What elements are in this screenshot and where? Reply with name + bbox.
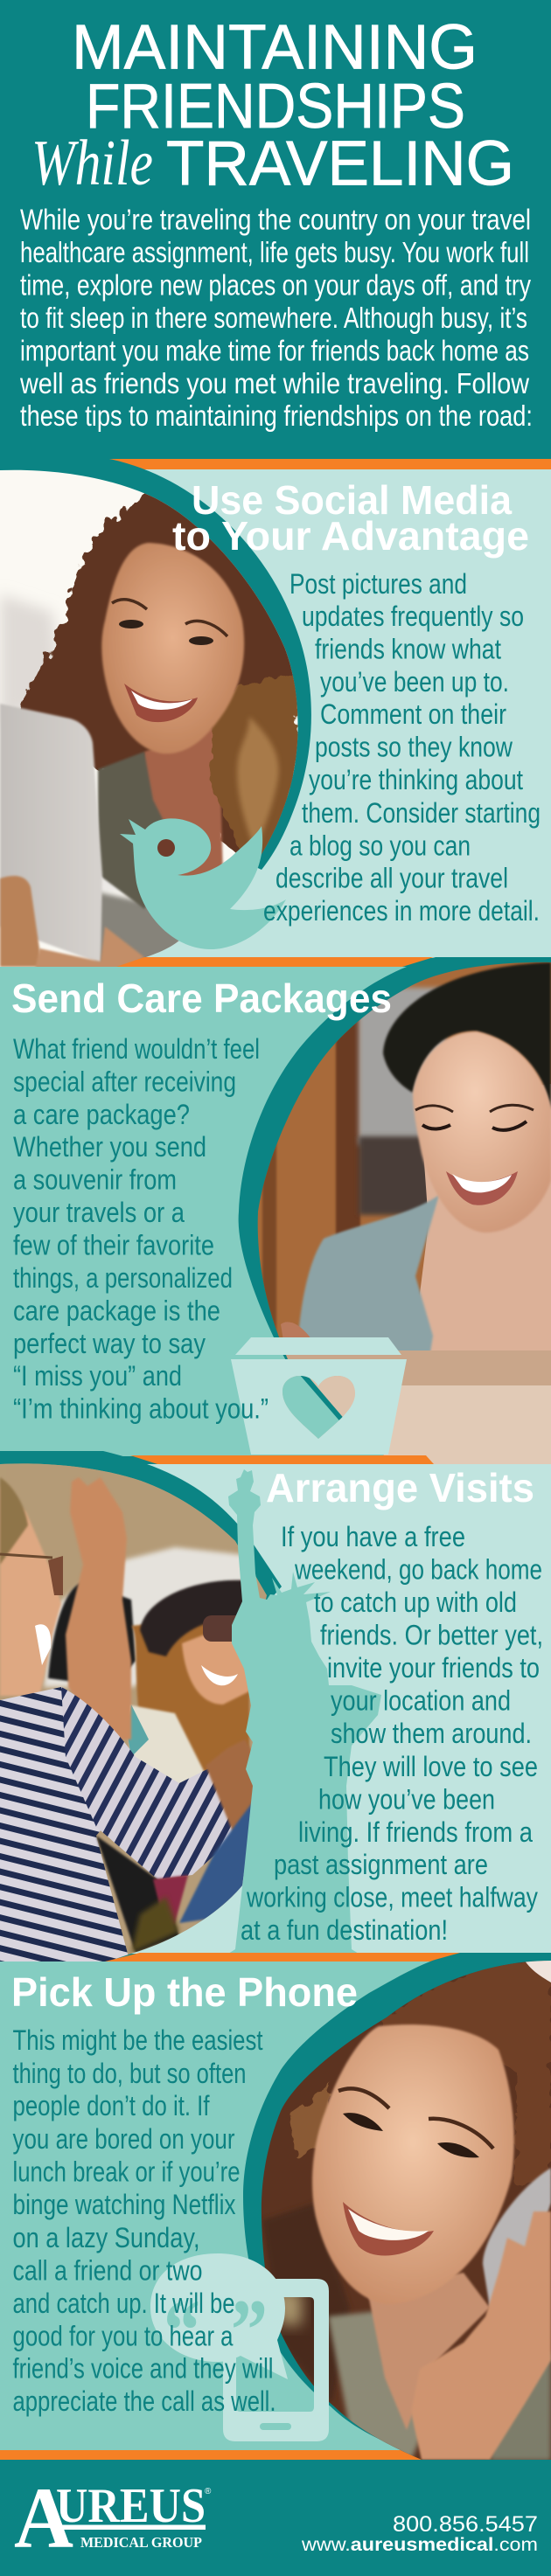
body text xyxy=(12,2024,276,2417)
icon: bird xyxy=(120,818,286,949)
body text: past assignment are xyxy=(274,1849,488,1880)
title: While xyxy=(31,128,153,199)
body text: What friend wouldn’t feel xyxy=(13,1033,260,1065)
heading: to Your Advantage xyxy=(172,513,529,559)
teal arc xyxy=(243,1953,551,2450)
body text: your travels or a xyxy=(13,1197,185,1228)
body text: a care package? xyxy=(13,1099,190,1130)
heading: Pick Up the Phone xyxy=(11,1969,358,2015)
icon: statue of liberty xyxy=(228,1469,381,1954)
orange band: section 3 to 4 xyxy=(105,1953,460,1962)
body text xyxy=(241,1521,543,1946)
photo: woman opening package xyxy=(254,957,551,1473)
body text: describe all your travel xyxy=(276,862,508,893)
logo: Aureus Medical Group: UREUS xyxy=(56,2479,206,2533)
orange band top xyxy=(107,459,551,469)
heading: Use Social Media xyxy=(192,477,512,523)
orange band top xyxy=(130,1455,434,1464)
body text: a souvenir from xyxy=(13,1164,177,1196)
panel background xyxy=(0,1962,551,2451)
body text: special after receiving xyxy=(13,1066,236,1098)
body text: This might be the easiest xyxy=(12,2024,263,2056)
body text: appreciate the call as well. xyxy=(12,2385,276,2417)
body text: perfect way to say xyxy=(13,1328,206,1359)
panel background xyxy=(0,469,551,958)
heading: Arrange Visits xyxy=(266,1465,534,1510)
orange band bottom xyxy=(105,1953,460,1962)
body text: lunch break or if you’re xyxy=(12,2156,240,2187)
body text: friends know what xyxy=(315,633,501,664)
panel background xyxy=(0,1464,551,1954)
body text: your location and xyxy=(331,1685,511,1717)
body text: and catch up. It will be xyxy=(12,2288,234,2319)
body text: Whether you send xyxy=(13,1131,206,1163)
photo: woman on phone xyxy=(254,1954,551,2465)
panel: pick up the phone xyxy=(0,1953,551,2465)
body text xyxy=(13,1033,269,1425)
intro text xyxy=(19,203,533,432)
teal arc xyxy=(0,459,311,870)
quotation marks: “ xyxy=(164,2281,200,2378)
body text: call a friend or two xyxy=(12,2255,203,2287)
photo: friends in a car xyxy=(0,1460,271,1967)
orange band bottom xyxy=(0,2450,424,2460)
body text: “I’m thinking about you.” xyxy=(13,1393,269,1425)
footer xyxy=(14,2469,538,2566)
body text: thing to do, but so often xyxy=(12,2058,247,2089)
phone number: 800.856.5457 xyxy=(393,2512,538,2537)
header panel xyxy=(19,12,533,432)
body text: Comment on their xyxy=(320,698,506,730)
icon: heart cutout xyxy=(282,1376,355,1439)
body text: you’ve been up to. xyxy=(320,666,509,698)
body text: posts so they know xyxy=(315,731,513,762)
logo: Aureus Medical Group: MEDICAL GROUP xyxy=(80,2534,202,2551)
title: FRIENDSHIPS xyxy=(86,72,465,142)
body text: friend’s voice and they will xyxy=(12,2353,273,2385)
body text: binge watching Netflix xyxy=(12,2189,236,2220)
body text: things, a personalized xyxy=(13,1262,233,1294)
body text: how you’ve been xyxy=(318,1783,495,1815)
body text: on a lazy Sunday, xyxy=(12,2222,199,2253)
body text: you are bored on your xyxy=(12,2123,235,2155)
body text: at a fun destination! xyxy=(241,1914,448,1946)
body text xyxy=(263,568,541,927)
body text: a blog so you can xyxy=(289,830,471,862)
body text: If you have a free xyxy=(281,1521,465,1552)
panel: arrange visits xyxy=(0,1451,551,1967)
panel: send care packages xyxy=(0,957,551,1473)
body text: good for you to hear a xyxy=(12,2320,234,2351)
teal arc xyxy=(0,1451,282,1661)
panel: use social media xyxy=(0,459,551,970)
icon: gift box xyxy=(231,1337,407,1455)
logo: Aureus Medical Group: ® xyxy=(205,2487,212,2496)
logo: Aureus Medical Group xyxy=(14,2469,212,2566)
title xyxy=(31,12,514,199)
body text: people don’t do it. If xyxy=(12,2090,210,2121)
orange band: section 1 to 2 xyxy=(116,957,434,967)
closing quotation mark: ” xyxy=(231,2281,268,2378)
body text: “I miss you” and xyxy=(13,1360,182,1392)
body text: care package is the xyxy=(13,1295,220,1327)
website: www. aureusmedical .com xyxy=(301,2535,538,2555)
body text: few of their favorite xyxy=(13,1229,214,1260)
icon: phone with speech bubble xyxy=(150,2253,329,2441)
logo: Aureus Medical Group: A xyxy=(14,2469,73,2566)
body text: to catch up with old xyxy=(314,1587,517,1618)
heading: Send Care Packages xyxy=(11,976,392,1021)
title: MAINTAINING xyxy=(72,12,478,82)
panel background xyxy=(0,967,551,1456)
photo: smiling woman with tablet xyxy=(0,463,302,970)
heading xyxy=(172,477,529,559)
body text: Post pictures and xyxy=(289,568,467,600)
teal arc xyxy=(239,957,551,1399)
title: TRAVELING xyxy=(166,129,514,199)
